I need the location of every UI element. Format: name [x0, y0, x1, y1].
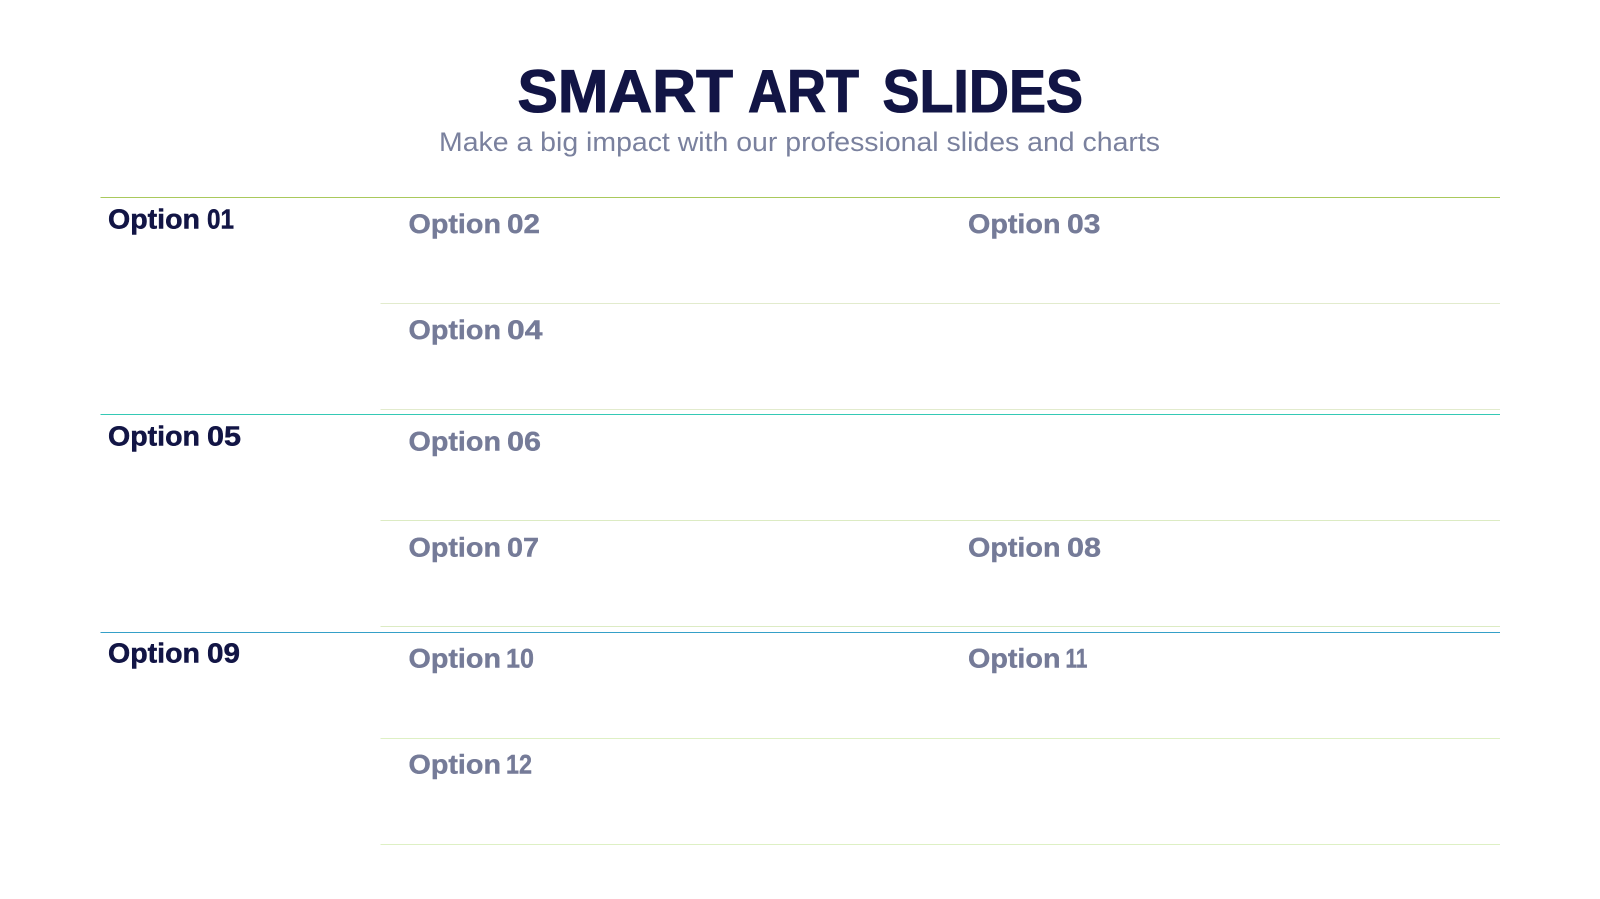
item: Option 02: 02 [507, 209, 540, 239]
item: Option 08: 08 [1067, 532, 1101, 562]
title: ART [748, 58, 859, 125]
heading: Option 09: Option [108, 638, 200, 668]
heading: Option 05: 05 [207, 420, 241, 452]
title [518, 58, 1083, 125]
heading: Option 05: Option [108, 420, 200, 452]
item: Option 10: Option [408, 644, 501, 674]
item: Option 11: Option [968, 644, 1060, 674]
heading: Option 05 [108, 420, 241, 452]
heading: Option 09 [108, 638, 240, 668]
title: SLIDES [882, 58, 1083, 125]
item: Option 08 [968, 532, 1101, 562]
item: Option 03: Option [968, 209, 1060, 239]
item: Option 06: 06 [507, 426, 541, 456]
panel: group 3 [100, 632, 1500, 845]
item: Option 04: 04 [507, 315, 542, 345]
item: Option 11: 11 [1066, 644, 1088, 674]
item: Option 08: Option [968, 532, 1060, 562]
item: Option 06 [408, 426, 541, 456]
item: Option 12: 12 [506, 750, 532, 780]
heading: Option 01: Option [108, 204, 200, 234]
item: Option 10 [408, 644, 534, 674]
item: Option 07: Option [408, 532, 501, 562]
item: Option 03 [968, 209, 1100, 239]
title: SMART [518, 58, 733, 125]
item: Option 04 [408, 315, 542, 345]
item: Option 02 [408, 209, 540, 239]
heading: Option 01: 01 [207, 204, 234, 234]
subtitle: Make a big impact with our professional slides and charts [439, 127, 1160, 157]
item: Option 02: Option [408, 209, 501, 239]
panel: group 2 [100, 414, 1500, 627]
item: Option 12: Option [408, 750, 501, 780]
item: Option 06: Option [408, 426, 501, 456]
item: Option 07: 07 [507, 532, 539, 562]
item: Option 04: Option [408, 315, 501, 345]
item: Option 10: 10 [506, 644, 534, 674]
item: Option 07 [408, 532, 539, 562]
panel: group 1 [100, 197, 1500, 410]
heading: Option 09: 09 [207, 638, 240, 668]
item: Option 03: 03 [1067, 209, 1100, 239]
